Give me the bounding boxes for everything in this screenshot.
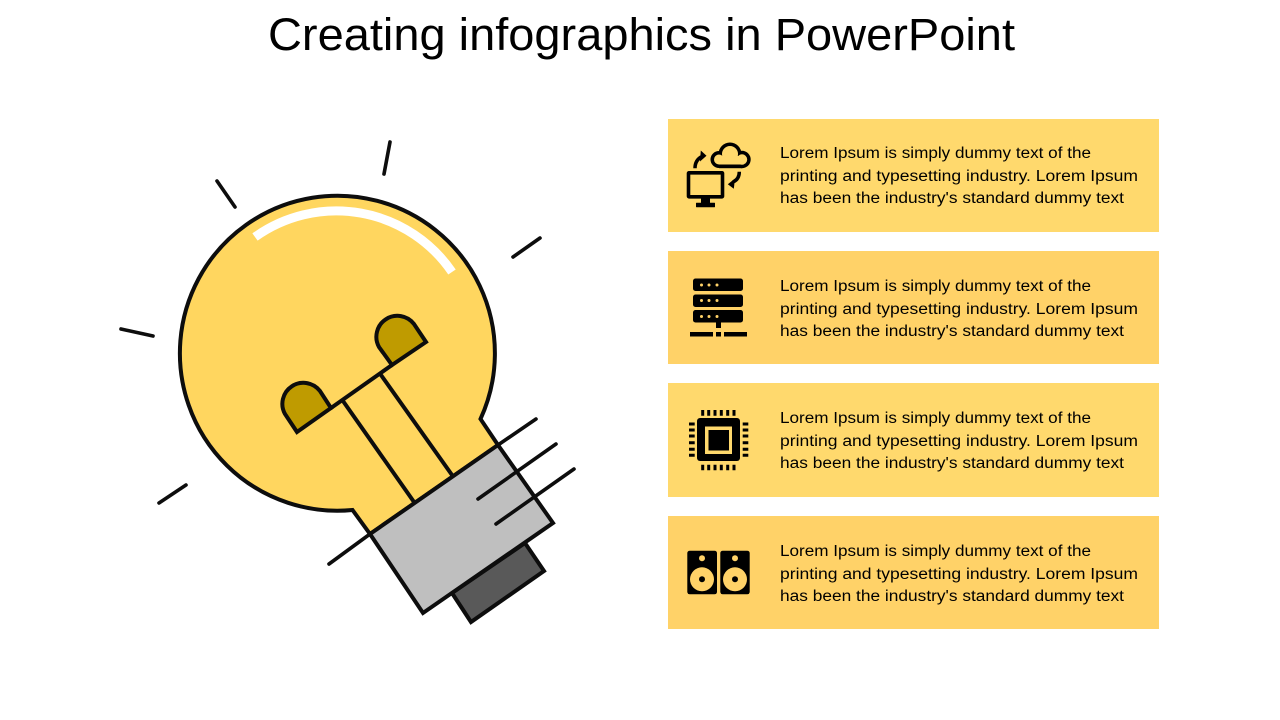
panel: server	[668, 251, 1159, 364]
thread lines	[329, 419, 574, 564]
text block: has been the industry's standard dummy text	[780, 588, 1125, 605]
text block: printing and typesetting industry. Lorem Ipsum	[780, 566, 1138, 583]
text block: Lorem Ipsum is simply dummy text of the	[780, 145, 1091, 162]
text block: printing and typesetting industry. Lorem Ipsum	[780, 433, 1138, 450]
bulb glass	[180, 196, 498, 534]
title: Creating infographics in PowerPoint	[268, 9, 1016, 60]
text block	[780, 410, 1138, 472]
text block: printing and typesetting industry. Lorem Ipsum	[780, 301, 1138, 318]
text block: has been the industry's standard dummy text	[780, 323, 1125, 340]
text block	[780, 145, 1138, 207]
panel: cloud sync	[668, 119, 1159, 232]
icon: microchip	[689, 410, 748, 470]
icon: speakers	[687, 551, 750, 594]
panel: speakers	[668, 516, 1159, 629]
lamp cap dark	[452, 543, 544, 622]
highlight arc	[255, 211, 452, 272]
filament	[282, 316, 452, 502]
panel: processor	[668, 383, 1159, 497]
text block: has been the industry's standard dummy text	[780, 190, 1125, 207]
text block	[780, 278, 1138, 340]
text block: Lorem Ipsum is simply dummy text of the	[780, 278, 1091, 295]
text block: Lorem Ipsum is simply dummy text of the	[780, 410, 1091, 427]
light bulb illustration	[121, 142, 574, 622]
icon: cloud and monitor	[688, 142, 751, 207]
lamp base	[370, 445, 553, 613]
text block: Lorem Ipsum is simply dummy text of the	[780, 543, 1091, 560]
icon: server rack	[690, 278, 747, 336]
text block: printing and typesetting industry. Lorem Ipsum	[780, 168, 1138, 185]
text block: has been the industry's standard dummy text	[780, 455, 1125, 472]
light rays	[121, 142, 540, 503]
text block	[780, 543, 1138, 605]
